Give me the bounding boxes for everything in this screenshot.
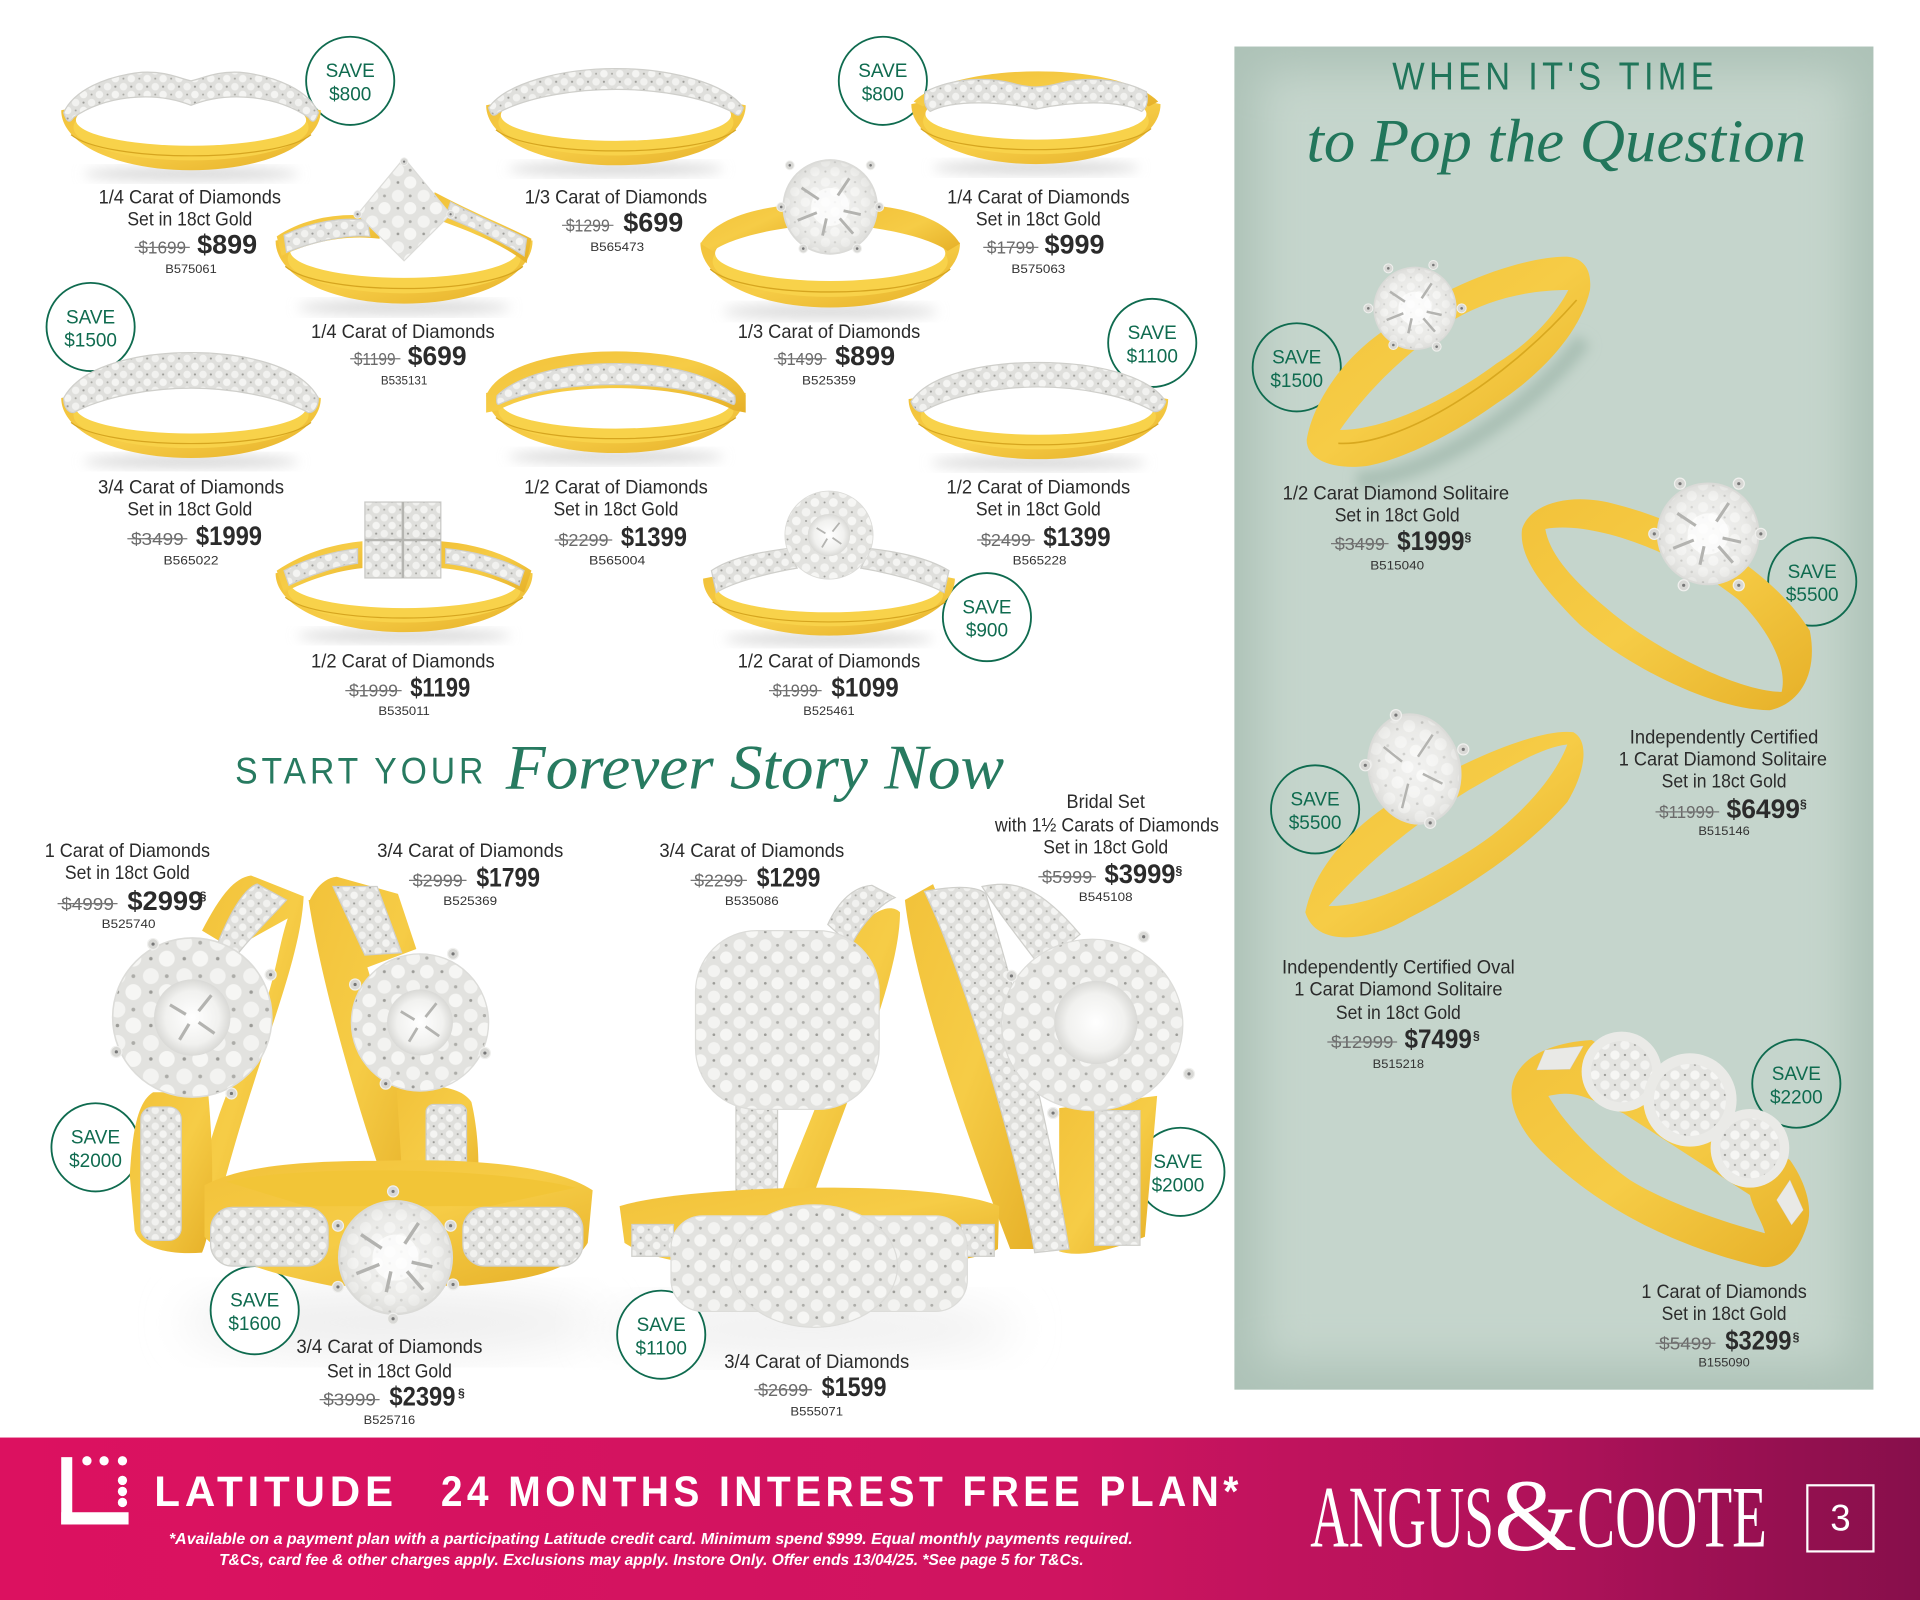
code: B525716	[364, 1413, 415, 1427]
panel heading: when it's time: WHEN IT'S TIME	[1392, 55, 1718, 98]
label: 1/3 Carat of Diamonds	[738, 322, 920, 343]
icon: cluster ring	[309, 877, 490, 1212]
label: 1/3 Carat of Diamonds	[525, 187, 707, 208]
code: B515146	[1698, 824, 1750, 838]
price	[320, 1382, 465, 1412]
product: 1/2 carat princess ring B535011	[276, 502, 533, 718]
icon: bridal set ring	[905, 884, 1194, 1254]
save badge: SAVE	[1290, 790, 1340, 811]
code: B525740	[102, 917, 156, 931]
price: $1999	[349, 681, 398, 701]
save badge	[1253, 323, 1341, 411]
save badge: $1600	[228, 1314, 281, 1335]
label line 2: Set in 18ct Gold	[65, 863, 190, 884]
price: $1199	[410, 673, 470, 703]
icon: band ring	[61, 353, 321, 468]
product: 1/4 carat band B575061	[61, 37, 394, 276]
price	[127, 521, 262, 551]
product: 1/2 carat channel band B565004	[486, 351, 746, 567]
price: §	[458, 1386, 465, 1400]
price: $1999	[1397, 526, 1464, 556]
product: 3/4 carat cushion ring B535086	[659, 841, 900, 1209]
page number box	[1807, 1485, 1873, 1551]
product: 1/4 carat twist ring B535131	[276, 158, 533, 387]
label: Independently Certified	[1630, 727, 1818, 748]
price: $1799	[476, 863, 540, 893]
save badge	[839, 37, 927, 125]
price: $7499	[1404, 1024, 1472, 1054]
label line 2: 1 Carat Diamond Solitaire	[1619, 749, 1827, 770]
panel heading: to pop the question: to Pop the Question	[1307, 108, 1806, 176]
save badge: $2000	[1152, 1175, 1204, 1196]
product: 1/4 carat band B575063	[839, 37, 1161, 276]
heading part: start your: START YOUR	[235, 751, 487, 792]
product: half carat solitaire	[1253, 257, 1590, 572]
price: $699	[623, 207, 683, 237]
price	[555, 522, 687, 552]
code: B515218	[1373, 1057, 1424, 1071]
price: $1399	[621, 522, 687, 552]
code: B535131	[381, 373, 428, 387]
label: 1 Carat of Diamonds	[1641, 1282, 1807, 1303]
label line 2: Set in 18ct Gold	[1662, 1304, 1787, 1325]
price	[562, 207, 683, 237]
price: $4999	[61, 894, 114, 914]
offer headline: 24 MONTHS INTEREST FREE PLAN*	[441, 1468, 1243, 1516]
icon: princess cluster ring	[276, 502, 533, 642]
price	[135, 229, 257, 259]
price	[769, 673, 899, 703]
product: 1 carat cluster ring B525740	[45, 841, 304, 1253]
save badge: $2200	[1770, 1087, 1823, 1108]
price: $2299	[694, 871, 743, 891]
label line 2: with 1½ Carats of Diamonds	[994, 815, 1219, 836]
price	[409, 863, 540, 893]
product: bridal set B545108	[905, 792, 1224, 1254]
label: 1/2 Carat of Diamonds	[947, 477, 1130, 498]
icon: twist cluster ring	[276, 158, 533, 314]
icon: band ring	[486, 69, 746, 175]
save badge	[1136, 1128, 1224, 1216]
price	[58, 886, 207, 916]
price: $1999	[196, 521, 262, 551]
price: $1299	[566, 215, 610, 235]
price: $2299	[558, 530, 609, 550]
label line 2: Set in 18ct Gold	[976, 500, 1101, 521]
brand logo: angus and coote: ANGUS	[1310, 1469, 1494, 1567]
product: certified oval solitaire	[1271, 703, 1584, 1071]
save badge: $2000	[69, 1151, 122, 1172]
product: 1/3 carat solitaire B525359	[700, 159, 960, 387]
label: Bridal Set	[1067, 792, 1146, 813]
panel: when it's time	[1234, 47, 1873, 1390]
heading: start your forever story now	[235, 732, 1004, 803]
price: $699	[408, 341, 467, 371]
price: $1099	[831, 673, 899, 703]
code: B565004	[589, 553, 646, 567]
price: §	[1176, 863, 1183, 877]
code: B545108	[1079, 890, 1133, 904]
icon: band ring	[909, 362, 1168, 469]
save badge: SAVE	[326, 61, 375, 82]
save badge: SAVE	[71, 1128, 120, 1149]
price: $1399	[1043, 522, 1111, 552]
fine print line 2: T&Cs, card fee & other charges apply. Exclusions may apply. Instore Only. Offer ends 13/04/25. *See page 5 for T&Cs.	[219, 1552, 1084, 1569]
reflection shadow	[600, 1299, 1016, 1358]
save badge: SAVE	[1788, 562, 1837, 583]
product: three stone ring	[1511, 1032, 1840, 1370]
save badge: SAVE	[66, 307, 115, 328]
price: §	[1793, 1330, 1800, 1344]
price	[1331, 526, 1471, 556]
save badge: $1100	[1127, 346, 1178, 367]
icon: solitaire ring	[1307, 257, 1590, 480]
label: Independently Certified Oval	[1282, 957, 1515, 978]
code: B535086	[725, 894, 779, 908]
price: $2699	[758, 1380, 808, 1400]
save badge	[1108, 299, 1196, 387]
label line 2: 1 Carat Diamond Solitaire	[1294, 980, 1502, 1001]
label line 3: Set in 18ct Gold	[1043, 837, 1168, 858]
save badge	[617, 1291, 705, 1379]
icon: cluster ring	[111, 876, 304, 1253]
product: certified one carat solitaire	[1522, 478, 1856, 838]
save badge: SAVE	[637, 1315, 686, 1336]
brand logo: angus and coote: &	[1494, 1459, 1577, 1573]
save badge	[211, 1266, 299, 1354]
price: §	[1800, 797, 1807, 811]
price	[1327, 1024, 1480, 1054]
save badge	[1752, 1040, 1840, 1128]
price	[345, 673, 470, 703]
code: B525461	[803, 704, 855, 718]
save badge: $1500	[1270, 371, 1323, 392]
label: 1/2 Carat of Diamonds	[311, 651, 495, 672]
save badge: $5500	[1786, 585, 1839, 606]
label line 2: Set in 18ct Gold	[127, 500, 252, 521]
price	[983, 229, 1104, 259]
save badge: $800	[862, 84, 904, 105]
save badge: SAVE	[1128, 323, 1177, 344]
save badge: $800	[329, 84, 371, 105]
price: $3499	[1335, 534, 1385, 554]
price: $12999	[1331, 1032, 1393, 1052]
code: B565473	[590, 240, 644, 254]
price	[754, 1372, 887, 1402]
price: $5999	[1042, 867, 1092, 887]
price: $1699	[138, 237, 186, 257]
price	[1656, 1325, 1800, 1355]
code: B525369	[443, 894, 497, 908]
brand logo: angus and coote	[1310, 1459, 1767, 1573]
price	[1038, 859, 1183, 889]
panel background	[1234, 47, 1873, 1390]
product: 1/2 carat band B565228	[909, 299, 1196, 567]
product: 3/4 carat cluster ring B525369	[309, 841, 563, 1212]
save badge	[1271, 765, 1359, 853]
save badge: SAVE	[230, 1291, 279, 1312]
label line 2: Set in 18ct Gold	[327, 1362, 452, 1383]
price	[1656, 794, 1807, 824]
label: 3/4 Carat of Diamonds	[98, 477, 284, 498]
label line 2: Set in 18ct Gold	[976, 209, 1101, 230]
code: B535011	[378, 704, 430, 718]
label: 1 Carat of Diamonds	[45, 841, 210, 862]
save badge: $5500	[1289, 813, 1341, 834]
icon: halo ring	[703, 491, 955, 645]
icon: trilogy cluster ring	[620, 1188, 999, 1327]
price	[977, 522, 1111, 552]
price: $1299	[757, 863, 820, 893]
banner: latitude interest free plan	[0, 1438, 1920, 1600]
label line 2: Set in 18ct Gold	[553, 500, 678, 521]
price: $999	[1044, 229, 1104, 259]
product: 3/4 carat trilogy cluster ring B555071	[600, 1188, 1016, 1419]
price: §	[1464, 530, 1471, 544]
price: $2499	[981, 530, 1031, 550]
heading part: forever story now: Forever Story Now	[505, 732, 1004, 803]
price: $6499	[1727, 794, 1800, 824]
save badge: SAVE	[1272, 348, 1321, 369]
reflection shadow	[184, 1291, 600, 1354]
code: B555071	[790, 1405, 843, 1419]
icon: channel set ring	[486, 351, 746, 463]
label: 1/2 Carat Diamond Solitaire	[1283, 484, 1509, 505]
label line 2: Set in 18ct Gold	[127, 209, 252, 230]
save badge	[943, 573, 1031, 661]
banner background	[0, 1438, 1920, 1600]
label line 3: Set in 18ct Gold	[1336, 1003, 1461, 1024]
code: B515040	[1370, 558, 1424, 572]
save badge: SAVE	[1153, 1152, 1203, 1173]
price: $11999	[1659, 802, 1714, 822]
icon: three stone ring	[1511, 1032, 1809, 1267]
icon: wave band ring	[911, 71, 1161, 174]
icon: latitude logo	[61, 1456, 129, 1524]
price: $899	[835, 341, 895, 371]
icon: wave band ring	[61, 72, 321, 180]
product: 1/2 carat halo ring B525461	[703, 491, 1031, 718]
price: $5499	[1659, 1333, 1712, 1353]
price	[774, 341, 895, 371]
code: B575063	[1011, 262, 1066, 276]
price: $1599	[822, 1372, 887, 1402]
icon: oval solitaire ring	[1305, 703, 1584, 937]
save badge: $1500	[64, 331, 117, 352]
fine print line 1: *Available on a payment plan with a participating Latitude credit card. Minimum spend $999. Equal monthly payments required.	[169, 1531, 1133, 1548]
price: $3499	[131, 529, 184, 549]
price: $2999	[413, 871, 463, 891]
price: $1799	[987, 237, 1035, 257]
label: 3/4 Carat of Diamonds	[724, 1352, 909, 1373]
label: 3/4 Carat of Diamonds	[659, 841, 844, 862]
price: $3999	[323, 1390, 376, 1410]
price: §	[1473, 1029, 1480, 1043]
code: B565228	[1013, 553, 1067, 567]
save badge: $900	[966, 621, 1008, 642]
code: B565022	[163, 553, 219, 567]
code: B155090	[1698, 1356, 1750, 1370]
label: 1/2 Carat of Diamonds	[738, 651, 920, 672]
price	[350, 341, 467, 371]
label: 3/4 Carat of Diamonds	[377, 841, 563, 862]
price: $3999	[1104, 859, 1176, 889]
label: 1/4 Carat of Diamonds	[99, 187, 281, 208]
label: 3/4 Carat of Diamonds	[296, 1337, 482, 1358]
price: $3299	[1725, 1325, 1791, 1355]
save badge	[47, 283, 135, 371]
price: $2999	[127, 886, 203, 916]
latitude wordmark: LATITUDE	[154, 1468, 398, 1516]
price: $1499	[778, 349, 823, 369]
price: $899	[197, 229, 257, 259]
code: B575061	[165, 262, 217, 276]
price: $2399	[389, 1382, 456, 1412]
save badge: SAVE	[1772, 1064, 1821, 1085]
product: 3/4 carat band B565022	[47, 283, 321, 567]
price	[691, 863, 820, 893]
label line 3: Set in 18ct Gold	[1662, 771, 1787, 792]
save badge	[51, 1103, 140, 1191]
save badge: SAVE	[962, 597, 1012, 618]
icon: cushion cluster ring	[696, 885, 900, 1209]
label line 2: Set in 18ct Gold	[1335, 506, 1460, 527]
price: $1999	[773, 681, 818, 701]
icon: solitaire ring	[1522, 478, 1812, 710]
save badge: SAVE	[858, 61, 907, 82]
brand logo: angus and coote: COOTE	[1577, 1469, 1767, 1567]
icon: channel solitaire ring	[204, 1160, 593, 1324]
icon: solitaire ring	[700, 159, 960, 318]
label: 1/4 Carat of Diamonds	[947, 187, 1130, 208]
code: B525359	[802, 373, 856, 387]
save badge	[306, 37, 394, 125]
product: 3/4 carat solitaire ring B525716	[184, 1160, 600, 1427]
price: §	[200, 889, 207, 903]
label: 1/4 Carat of Diamonds	[311, 322, 495, 343]
page number box: 3	[1830, 1498, 1851, 1539]
product: 1/3 carat band B565473	[486, 69, 746, 254]
save badge: $1100	[636, 1338, 687, 1359]
label: 1/2 Carat of Diamonds	[524, 477, 708, 498]
save badge	[1768, 538, 1856, 626]
price: $1199	[354, 349, 396, 369]
